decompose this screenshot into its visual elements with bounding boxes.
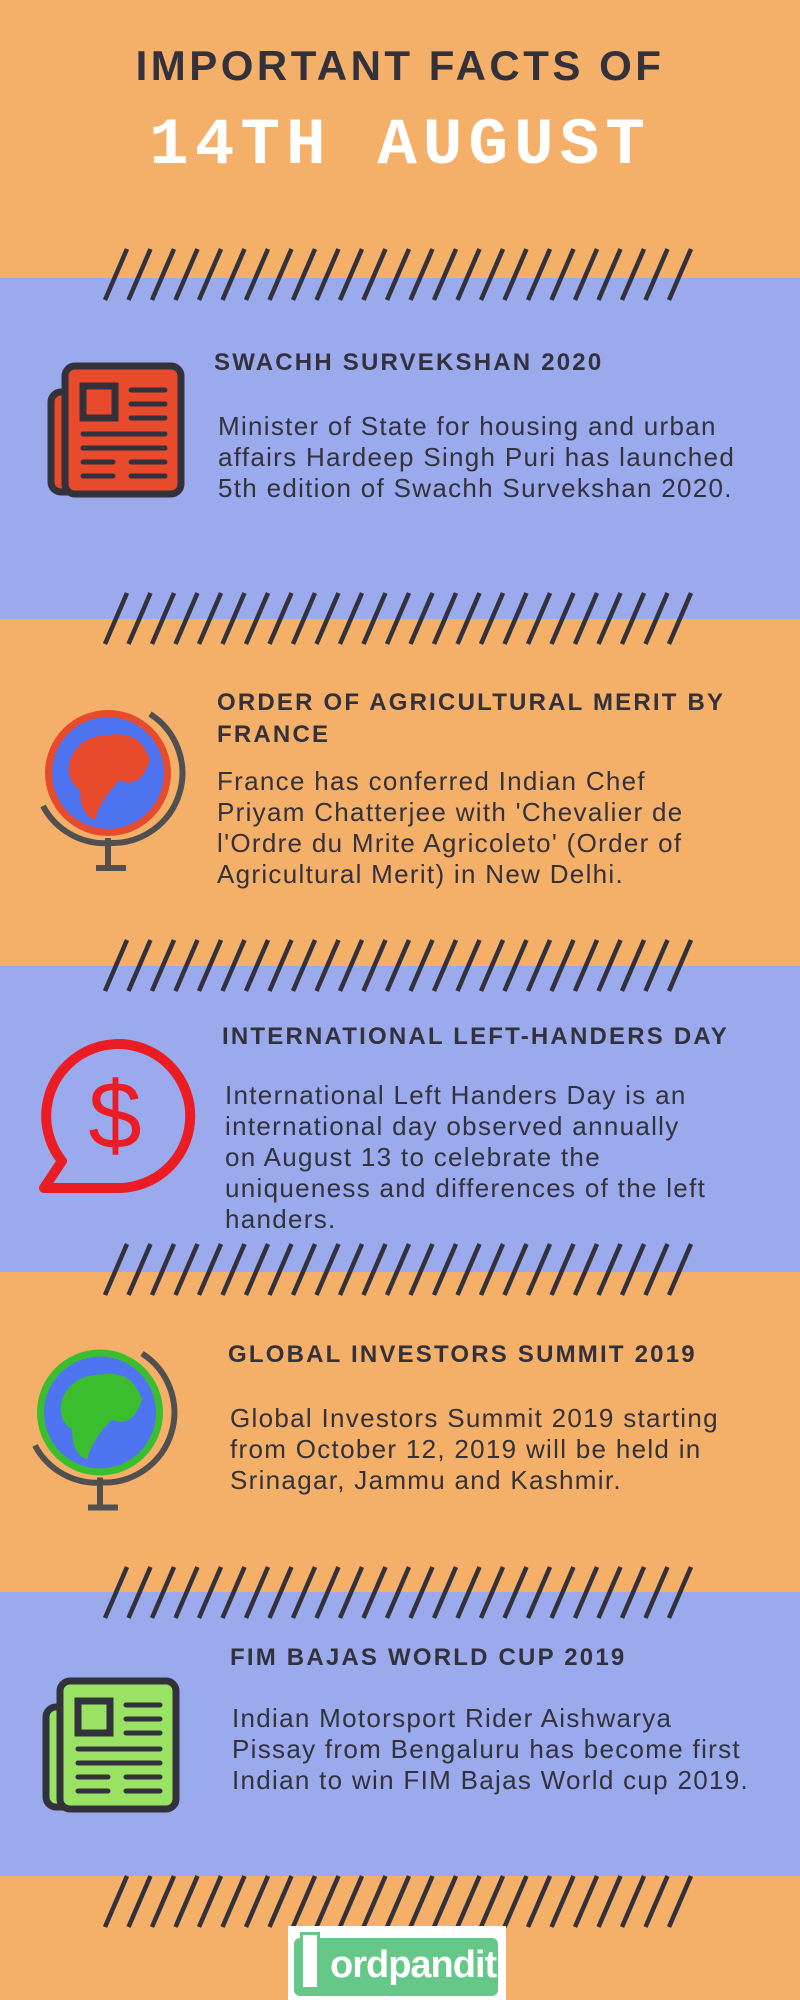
heading 5: FIM BAJAS WORLD CUP 2019 — [230, 1644, 626, 1671]
text 3: international day observed annually — [225, 1111, 680, 1141]
text 2: l'Ordre du Mrite Agricoleto' (Order of — [217, 828, 682, 858]
text 5 — [232, 1703, 749, 1795]
logo: ordpandit — [330, 1944, 496, 1986]
icon: newspaper red — [48, 362, 184, 498]
icon: globe red — [40, 710, 186, 871]
heading 1: SWACHH SURVEKSHAN 2020 — [214, 349, 603, 376]
text 5: Indian Motorsport Rider Aishwarya — [232, 1703, 672, 1733]
text 5: Pissay from Bengaluru has become first — [232, 1734, 741, 1764]
text 2: Agricultural Merit) in New Delhi. — [217, 859, 624, 889]
text 1: 5th edition of Swachh Survekshan 2020. — [218, 473, 733, 503]
text 1: Minister of State for housing and urban — [218, 411, 717, 441]
logo — [288, 1926, 506, 2000]
text 4: Srinagar, Jammu and Kashmir. — [230, 1465, 622, 1495]
text 2: Priyam Chatterjee with 'Chevalier de — [217, 797, 684, 827]
text 3 — [225, 1080, 706, 1234]
heading 2: ORDER OF AGRICULTURAL MERIT BY FRANCE — [217, 689, 725, 748]
text 3: handers. — [225, 1204, 337, 1234]
icon: newspaper green — [42, 1678, 180, 1812]
text 5: Indian to win FIM Bajas World cup 2019. — [232, 1765, 749, 1795]
icon: globe green — [32, 1350, 178, 1510]
icon: dollar bubble: $ — [88, 1062, 142, 1169]
text 2: France has conferred Indian Chef — [217, 766, 646, 796]
text 3: uniqueness and differences of the left — [225, 1173, 706, 1203]
text 1 — [218, 411, 735, 503]
text 4: from October 12, 2019 will be held in — [230, 1434, 702, 1464]
title: IMPORTANT FACTS OF — [136, 42, 664, 89]
text 4 — [230, 1403, 719, 1495]
text 3: on August 13 to celebrate the — [225, 1142, 601, 1172]
icon: dollar bubble — [39, 1039, 196, 1193]
heading 3: INTERNATIONAL LEFT-HANDERS DAY — [222, 1023, 729, 1050]
title: 14TH AUGUST — [149, 108, 651, 183]
text 1: affairs Hardeep Singh Puri has launched — [218, 442, 735, 472]
heading 4: GLOBAL INVESTORS SUMMIT 2019 — [228, 1341, 697, 1368]
title — [136, 42, 664, 183]
text 4: Global Investors Summit 2019 starting — [230, 1403, 719, 1433]
text 2 — [217, 766, 684, 889]
text 3: International Left Handers Day is an — [225, 1080, 687, 1110]
